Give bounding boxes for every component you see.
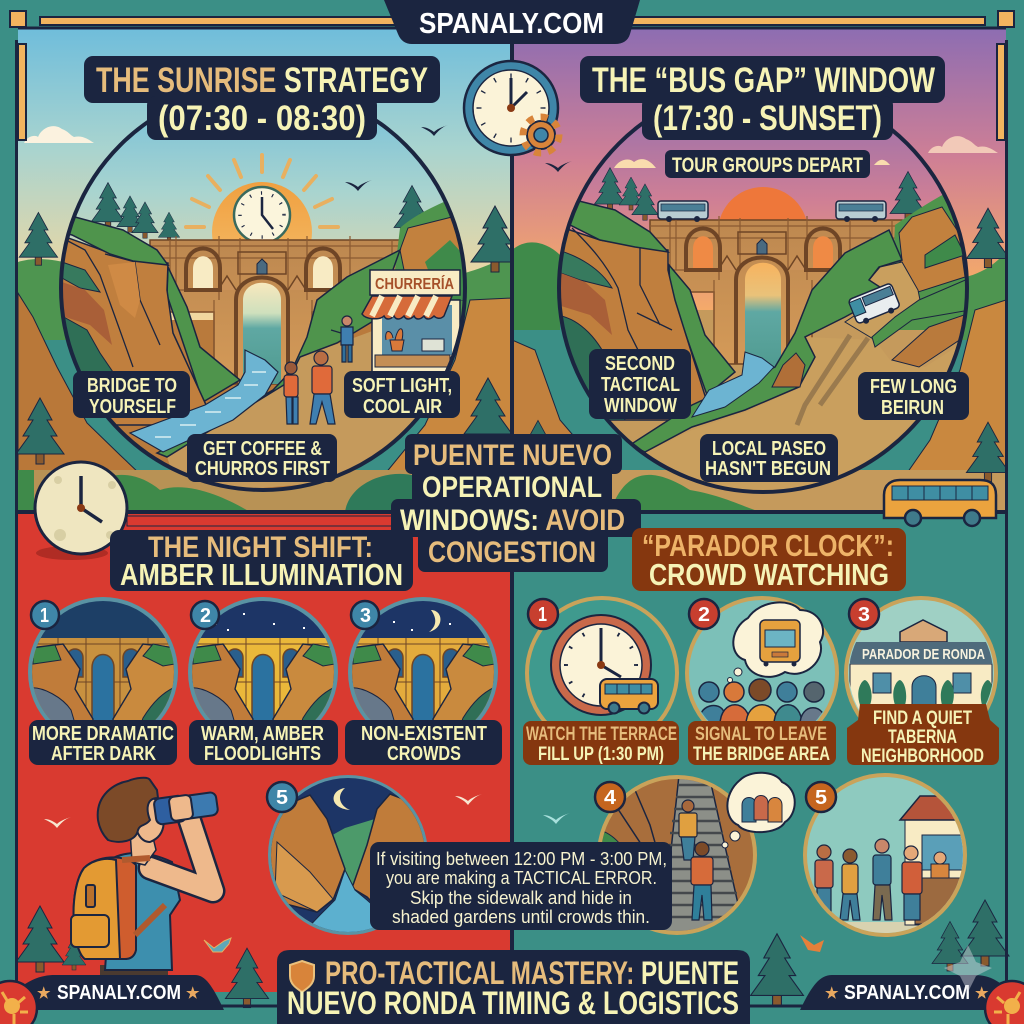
heading: pro-tactical mastery: NUEVO RONDA TIMING & LOGISTICS	[287, 985, 739, 1021]
right rock	[892, 313, 970, 367]
badge 5: 5	[276, 787, 288, 809]
green hillside	[630, 230, 902, 452]
bottom left site tab: ★	[186, 985, 200, 1002]
bottom right site tab: SPANALY.COM	[844, 982, 970, 1004]
heading: bus gap window: THE “BUS GAP” WINDOW	[592, 61, 935, 100]
churreria stall	[362, 270, 460, 375]
label 3	[847, 704, 999, 767]
winding road	[845, 262, 920, 340]
pediment	[900, 620, 947, 642]
birds	[345, 125, 448, 191]
road tracks	[797, 335, 868, 425]
panel: sunrise strategy	[16, 28, 519, 512]
label 1: MORE DRAMATIC	[32, 723, 174, 745]
card 1: more dramatic	[28, 597, 178, 765]
label 2: SIGNAL TO LEAVE	[695, 724, 827, 745]
badge 3	[351, 601, 379, 629]
badge 4: 4	[604, 787, 617, 809]
badge 5: 5	[815, 787, 827, 809]
bottom left site tab: SPANALY.COM	[57, 982, 181, 1004]
right hillside	[157, 190, 470, 495]
dusk clouds	[928, 136, 998, 153]
heading: sunrise strategy: (07:30 - 08:30)	[158, 99, 366, 138]
label 2: THE BRIDGE AREA	[693, 744, 830, 765]
red background	[18, 512, 512, 992]
climbers	[679, 800, 713, 920]
label 1: WATCH THE TERRACE	[526, 724, 677, 745]
bottom right site tab	[800, 975, 1008, 1010]
label 3: NON-EXISTENT	[361, 723, 487, 745]
blue-green bird	[204, 938, 231, 952]
heading: night shift: AMBER ILLUMINATION	[120, 557, 403, 592]
bridge	[150, 236, 402, 384]
bridge openings	[693, 236, 833, 372]
label: coffee and churros: GET COFFEE &	[203, 438, 322, 460]
label 2	[688, 721, 836, 765]
badge 3: 3	[360, 605, 371, 627]
dusk outer landscape	[512, 208, 1010, 512]
binoculars	[153, 792, 219, 825]
thought bubble	[728, 602, 823, 682]
label 3: TABERNA	[888, 727, 957, 748]
right slope and road	[632, 195, 965, 452]
label: bridge to yourself: BRIDGE TO	[87, 375, 177, 397]
badge 1: 1	[40, 605, 49, 627]
setting sun	[720, 187, 806, 220]
label 1: AFTER DARK	[51, 743, 156, 765]
sunrise sky	[18, 30, 510, 272]
teal panel birds and trees	[543, 813, 1009, 1006]
label: few long beirun	[858, 372, 969, 420]
heading: night shift	[110, 530, 413, 592]
card 1: terrace clock	[523, 598, 679, 765]
label: soft light: COOL AIR	[363, 396, 442, 418]
right green patch	[872, 278, 970, 347]
clock face	[551, 615, 651, 715]
callout: tactical error	[370, 842, 672, 930]
heading: bus gap window	[580, 56, 945, 140]
heading: parador clock: “PARADOR CLOCK”:	[642, 528, 894, 563]
label: local paseo: LOCAL PASEO	[712, 438, 826, 460]
lens clouds	[614, 159, 890, 168]
lens trees	[594, 168, 926, 221]
bridge openings	[193, 256, 333, 384]
card 3: parador	[846, 598, 999, 767]
icon: sun corner right	[985, 981, 1024, 1024]
ground	[807, 337, 813, 365]
barman	[931, 852, 949, 878]
left cliff	[60, 215, 240, 425]
panel: night shift	[16, 512, 512, 1008]
label: local paseo	[700, 434, 838, 482]
panel: parador clock	[512, 512, 1009, 1006]
label: coffee and churros	[187, 434, 337, 482]
night trees	[16, 906, 269, 1008]
label: few long beirun: BEIRUN	[881, 397, 944, 419]
top site tab: SPANALY.COM	[419, 8, 604, 40]
label 3: FIND A QUIET	[873, 708, 972, 729]
dusk sky	[512, 28, 1006, 288]
orange bus icon	[884, 480, 996, 526]
awning	[362, 296, 452, 319]
small rock	[772, 353, 805, 387]
teal background	[512, 512, 1006, 992]
label: coffee and churros: CHURROS FIRST	[195, 458, 330, 480]
heading: central title: CONGESTION	[428, 536, 596, 569]
gear	[523, 117, 559, 153]
heading: bus gap window: (17:30 - SUNSET)	[653, 99, 882, 138]
label 1	[523, 721, 679, 765]
label: bridge to yourself: YOURSELF	[89, 396, 176, 418]
queue of people	[815, 839, 922, 920]
heading: sunrise strategy: THE SUNRISE STRATEGY	[96, 61, 428, 100]
heading: central title	[391, 434, 641, 572]
left cliff	[555, 200, 735, 420]
sun with clock	[184, 153, 340, 240]
panel: bus gap window	[512, 28, 1010, 512]
river ripples	[155, 372, 266, 437]
badge 5	[806, 782, 836, 812]
crowd thought bubble	[722, 773, 795, 848]
label 3: CROWDS	[387, 743, 461, 765]
label 2: FLOODLIGHTS	[204, 743, 321, 765]
label: tour groups depart	[665, 150, 870, 178]
hiker with binoculars	[71, 778, 219, 985]
dusk bird	[545, 161, 572, 172]
callout: tactical error: If visiting between 12:00 PM - 3:00 PM,	[376, 849, 667, 869]
heading: parador clock: CROWD WATCHING	[649, 557, 889, 592]
badge 1	[528, 599, 558, 629]
label 1: FILL UP (1:30 PM)	[538, 744, 664, 765]
label 2	[189, 720, 338, 765]
coaches on bridge	[658, 201, 886, 222]
card 2: signal to leave	[687, 598, 837, 765]
heading: pro-tactical mastery: PRO-TACTICAL MASTERY: PUENTE	[325, 955, 739, 991]
label: second tactical window	[589, 349, 691, 419]
badge 1: 1	[538, 604, 547, 626]
callout: tactical error: Skip the sidewalk and hide in	[410, 888, 632, 908]
label: soft light: SOFT LIGHT,	[352, 375, 452, 397]
backpack	[71, 857, 165, 959]
label: local paseo: HASN'T BEGUN	[705, 458, 831, 480]
badge 5	[267, 782, 297, 812]
heading: central title: OPERATIONAL	[422, 471, 602, 504]
card 5: gorge at night	[267, 775, 432, 936]
moon clock	[35, 462, 127, 560]
heading: central title: WINDOWS: AVOID	[400, 504, 625, 537]
heading: pro-tactical mastery	[277, 950, 750, 1024]
sunrise outer landscape	[16, 206, 519, 512]
badge 2: 2	[698, 604, 710, 626]
sunrise clouds	[24, 126, 94, 143]
waiting crowd	[698, 679, 826, 725]
card 2: warm amber	[188, 597, 338, 765]
stair flight	[662, 775, 745, 935]
callout: tactical error: you are making a TACTICAL ERROR.	[386, 868, 657, 888]
red stripe under divider	[127, 516, 392, 526]
bottom left site tab	[16, 975, 224, 1010]
touring coach	[848, 283, 902, 327]
badge 2: 2	[200, 605, 211, 627]
stall sign: CHURRERÍA	[375, 274, 454, 293]
watermark sparkle	[944, 945, 992, 992]
label: soft light	[344, 371, 460, 418]
river	[130, 350, 278, 452]
heading: parador clock	[632, 528, 906, 592]
icon: shield	[290, 961, 314, 992]
top site tab	[384, 0, 640, 44]
label 2: WARM, AMBER	[201, 723, 324, 745]
bottom right site tab: ★	[825, 985, 839, 1002]
bottom right site tab: ★	[975, 985, 989, 1002]
birds	[44, 794, 482, 828]
top clock with gear	[464, 61, 559, 155]
parador sign: PARADOR DE RONDA	[862, 646, 985, 663]
label: bridge to yourself	[73, 371, 190, 418]
sunrise lens outline	[61, 86, 465, 490]
heading: central title: PUENTE NUEVO	[413, 439, 612, 472]
sunrise sky lens	[63, 124, 463, 488]
badge 3: 3	[858, 604, 870, 626]
card 4: stairs	[595, 773, 795, 935]
label 3	[345, 720, 502, 765]
river	[692, 352, 774, 417]
badge 3	[849, 599, 879, 629]
label: second tactical window: SECOND	[605, 353, 675, 375]
bus gap lens outline	[559, 84, 967, 492]
heading: sunrise strategy	[84, 56, 440, 140]
parador sign	[850, 642, 994, 664]
card 5: queue at taberna	[805, 775, 975, 940]
badge 1	[31, 601, 59, 629]
bridge	[650, 216, 902, 364]
label: second tactical window: TACTICAL	[601, 374, 680, 396]
badge 2	[689, 599, 719, 629]
label: few long beirun: FEW LONG	[870, 376, 957, 398]
label 1	[29, 720, 177, 765]
building	[850, 664, 992, 714]
churros	[386, 329, 404, 351]
badge 2	[191, 601, 219, 629]
label 3: NEIGHBORHOOD	[861, 746, 984, 767]
label: tour groups depart: TOUR GROUPS DEPART	[672, 154, 863, 177]
callout: tactical error: shaded gardens until crowds thin.	[392, 907, 650, 927]
bottom left site tab: ★	[37, 985, 51, 1002]
badge 4	[595, 782, 625, 812]
dusk lens	[561, 126, 965, 470]
walking visitors	[284, 316, 353, 424]
icon: sun corner left	[0, 981, 37, 1024]
lens trees	[91, 183, 430, 242]
label: second tactical window: WINDOW	[604, 395, 677, 417]
heading: night shift: THE NIGHT SHIFT:	[148, 531, 373, 564]
card 3: non-existent crowds	[345, 597, 502, 765]
